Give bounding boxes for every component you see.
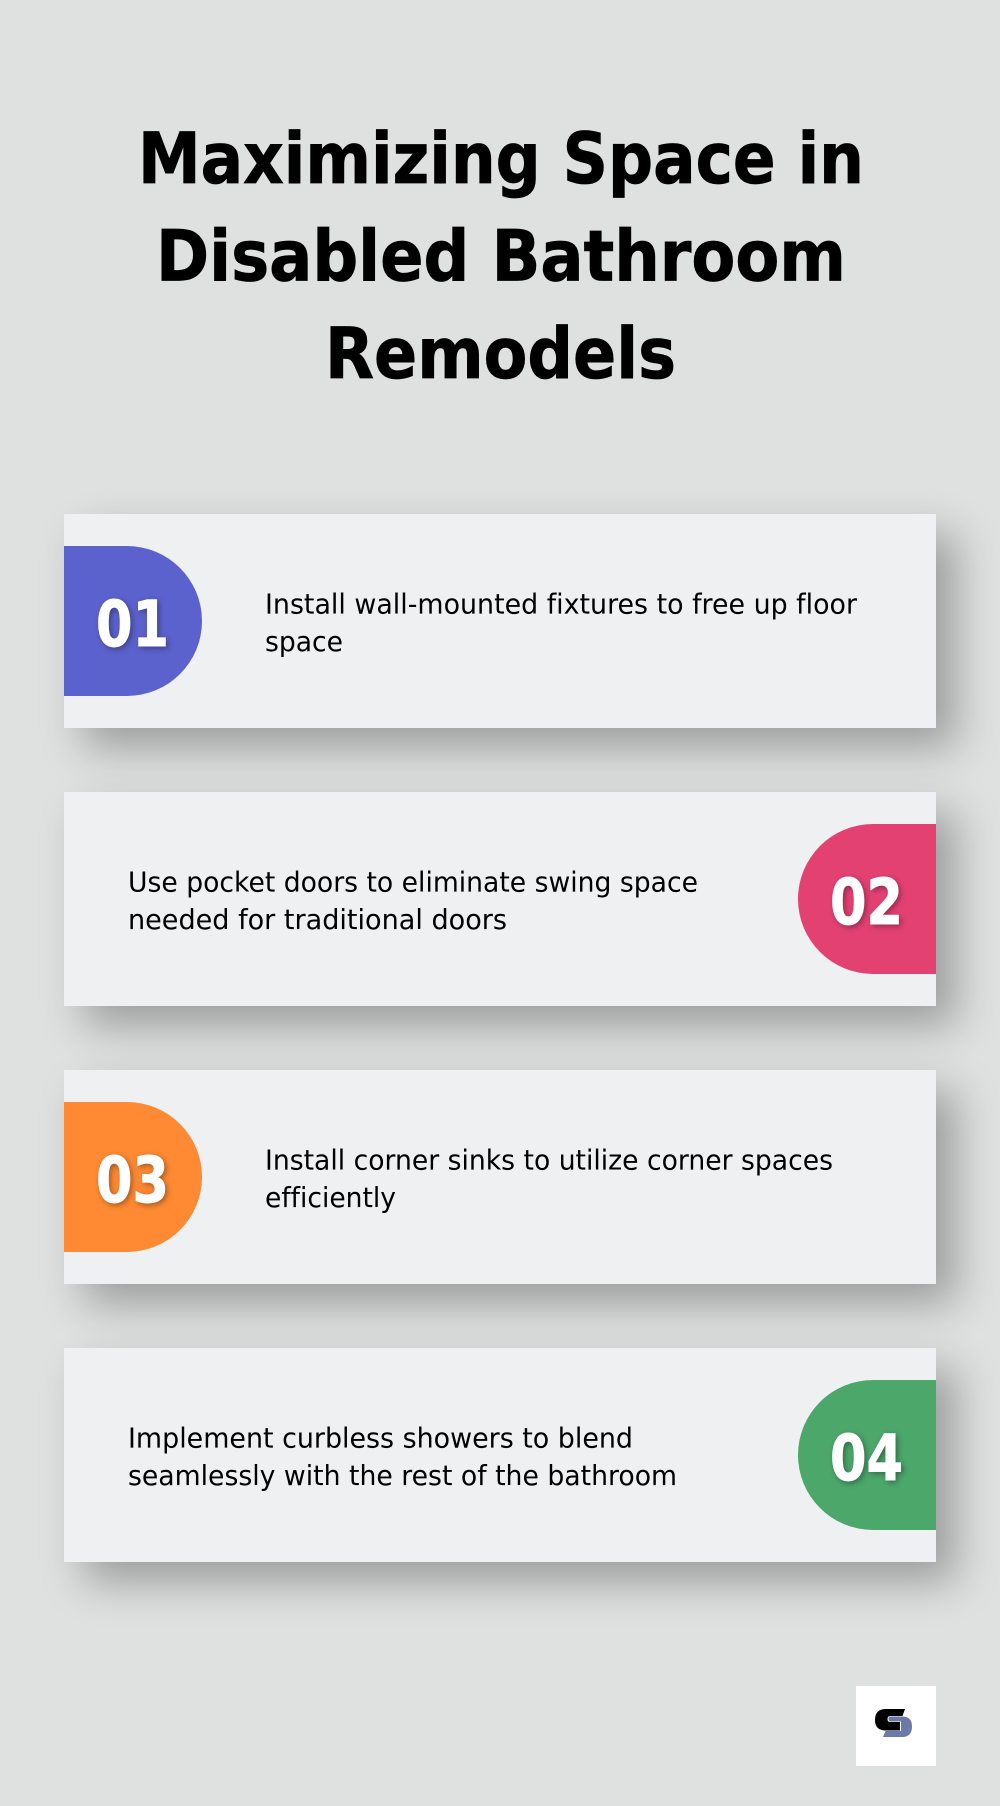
badge: 04 (798, 1380, 936, 1530)
badge: 01 (64, 546, 202, 696)
badge: 03 (64, 1102, 202, 1252)
panel: step 3 (64, 1070, 936, 1284)
badge: 04: 04 (830, 1421, 903, 1495)
title (138, 118, 864, 395)
title: Maximizing Space in (138, 118, 864, 200)
text: step 4 description: Implement curbless showers to blend (128, 1423, 633, 1454)
text: step 2 description: Use pocket doors to eliminate swing space (128, 867, 698, 898)
panel: step 2 (64, 792, 936, 1006)
text: step 4 description: seamlessly with the rest of the bathroom (128, 1461, 677, 1492)
title: Disabled Bathroom (156, 216, 846, 298)
text: step 1 description: space (265, 627, 343, 658)
panel: step 4 (64, 1348, 936, 1562)
text: step 2 description (128, 867, 698, 936)
badge: 03: 03 (96, 1143, 169, 1217)
panel: step 1 (64, 514, 936, 728)
text: step 1 description (265, 589, 858, 658)
text: step 2 description: needed for traditional doors (128, 905, 507, 936)
text: step 1 description: Install wall-mounted fixtures to free up floor (265, 589, 858, 620)
text: step 3 description: efficiently (265, 1183, 396, 1214)
title: Remodels (325, 313, 676, 395)
text: step 4 description (128, 1423, 677, 1492)
badge: 02: 02 (830, 865, 903, 939)
badge: 02 (798, 824, 936, 974)
text: step 3 description: Install corner sinks to utilize corner spaces (265, 1145, 833, 1176)
badge: 01: 01 (96, 587, 169, 661)
logo (856, 1686, 936, 1766)
text: step 3 description (265, 1145, 833, 1214)
